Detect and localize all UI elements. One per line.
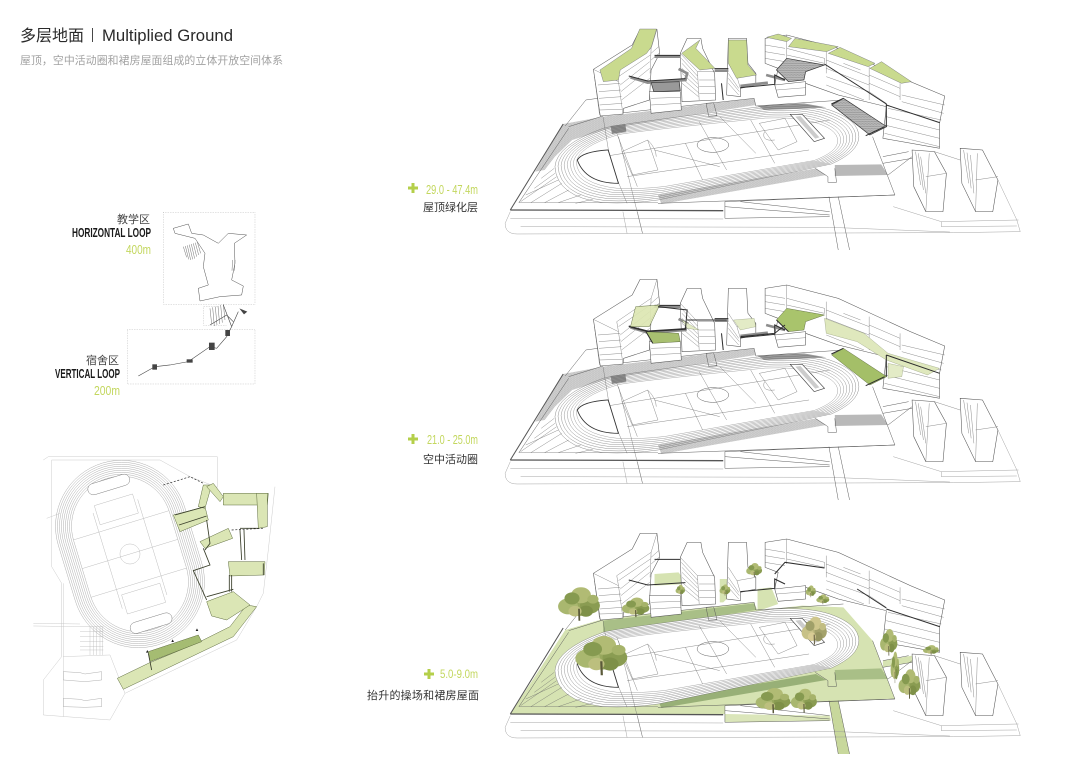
label: teaching zone horizontal loop: 教学区 <box>117 212 150 226</box>
markers <box>146 628 198 653</box>
label: dormitory zone vertical loop: VERTICAL LOOP <box>55 366 120 381</box>
label: sky activity loop: 空中活动圈 <box>423 452 478 466</box>
icon: plus <box>424 669 434 679</box>
stand shading <box>535 80 940 204</box>
icon: plus <box>408 434 418 444</box>
subtitle: 屋顶，空中活动圈和裙房屋面组成的立体开放空间体系 <box>20 53 283 67</box>
grey terraces <box>651 58 887 135</box>
label: sky activity loop: 21.0 - 25.0m <box>427 432 478 447</box>
label: raised ground: 5.0-9.0m <box>440 667 478 681</box>
panel: loop key plan <box>55 212 255 398</box>
shared line drawing <box>505 533 1020 754</box>
label: roof greening: 屋顶绿化层 <box>423 200 478 214</box>
loop diagram <box>127 212 255 384</box>
label: teaching zone horizontal loop <box>72 212 151 257</box>
walkways <box>629 305 785 350</box>
shared line drawing <box>505 279 1020 500</box>
title: Multiplied Ground <box>102 27 233 45</box>
panel: sky activity loop axonometric <box>505 279 1020 500</box>
track white surface <box>555 609 859 707</box>
running track <box>39 444 221 664</box>
title: 多层地面 <box>20 27 84 45</box>
dormitory plans <box>63 672 102 707</box>
panel: site plan with green loop <box>33 444 275 720</box>
label: sky activity loop <box>408 432 478 466</box>
green ground <box>510 572 912 754</box>
panel: raised ground axonometric <box>505 533 1020 754</box>
icon: plus <box>408 183 418 193</box>
stair grid <box>80 627 103 655</box>
label: roof greening: 29.0 - 47.4m <box>426 182 478 197</box>
shared line drawing <box>505 29 1020 250</box>
trees <box>558 563 939 713</box>
label: dormitory zone vertical loop: 宿舍区 <box>86 353 119 367</box>
loop edges <box>629 307 940 386</box>
loop edges <box>825 64 940 136</box>
green loop <box>117 483 268 689</box>
walkways <box>629 559 940 627</box>
site outline <box>33 457 275 720</box>
label: raised ground: 抬升的操场和裙房屋面 <box>367 688 479 702</box>
walkways <box>148 507 263 670</box>
dashed connectors <box>163 477 263 530</box>
label: raised ground <box>367 667 479 702</box>
walkways <box>629 55 785 100</box>
title <box>20 27 233 45</box>
label: teaching zone horizontal loop: 400m <box>126 242 151 257</box>
panel: roof greening axonometric <box>505 29 1020 250</box>
label: roof greening <box>408 182 478 214</box>
green roofs <box>600 29 911 83</box>
label: dormitory zone vertical loop: 200m <box>94 383 120 398</box>
stand shading <box>535 330 940 454</box>
label: teaching zone horizontal loop: HORIZONTAL LOOP <box>72 225 151 240</box>
label: dormitory zone vertical loop <box>55 353 120 398</box>
green sky loop <box>630 305 940 385</box>
